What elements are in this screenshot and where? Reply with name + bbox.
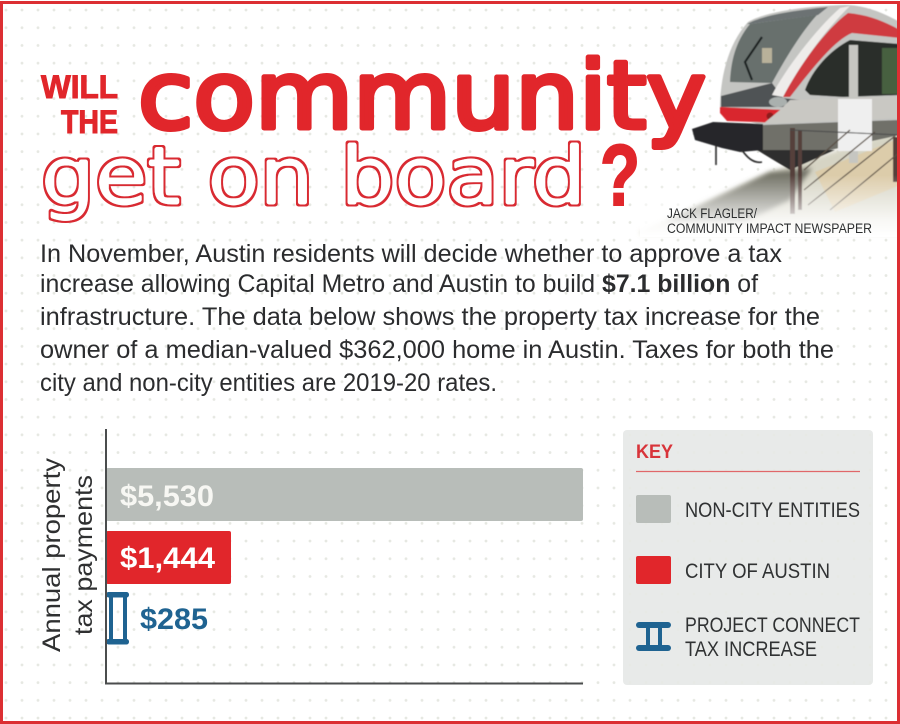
key: project connect: PROJECT CONNECT xyxy=(685,614,860,637)
title: will the xyxy=(41,69,118,140)
bar: Project Connect tax increase xyxy=(106,592,208,644)
title: get on board: get on board xyxy=(41,130,586,223)
bar: non-city entities xyxy=(106,468,583,521)
bar: city of Austin xyxy=(106,531,231,584)
title: will the: THE xyxy=(61,104,118,140)
title: question mark: ? xyxy=(600,128,640,224)
y-axis title: tax payments xyxy=(70,475,98,635)
bar: non-city entities: $5,530 xyxy=(120,480,214,513)
photo credit: JACK FLAGLER/ xyxy=(667,206,757,221)
title: community: community xyxy=(138,42,706,151)
key: city of Austin xyxy=(636,556,830,584)
title: will the: WILL xyxy=(41,69,118,105)
y-axis title xyxy=(38,457,98,652)
bar chart xyxy=(38,429,583,684)
key: non-city entities xyxy=(636,495,860,523)
key heading: KEY xyxy=(636,442,673,463)
bar: Project Connect tax increase: $285 xyxy=(140,603,208,636)
intro text: In November, Austin residents will decide whether to approve a tax xyxy=(40,240,782,268)
title xyxy=(41,42,706,224)
key: non-city entities: NON-CITY ENTITIES xyxy=(685,499,860,522)
bar: city of Austin: $1,444 xyxy=(120,542,215,575)
intro text: city and non-city entities are 2019-20 rates. xyxy=(40,369,497,397)
photo credit xyxy=(667,206,872,236)
panel: key xyxy=(623,430,873,685)
intro text xyxy=(40,240,834,397)
intro text: increase allowing Capital Metro and Austin to build $7.1 billion of xyxy=(40,270,758,298)
key: city of Austin: CITY OF AUSTIN xyxy=(685,560,830,583)
photo: Capital Metro train xyxy=(640,5,900,237)
intro text: owner of a median-valued $362,000 home in Austin. Taxes for both the xyxy=(40,336,834,364)
axes xyxy=(106,429,583,684)
intro text: infrastructure. The data below shows the property tax increase for the xyxy=(40,303,820,331)
photo credit: COMMUNITY IMPACT NEWSPAPER xyxy=(667,221,872,236)
key: project connect: TAX INCREASE xyxy=(685,638,817,661)
key: project connect xyxy=(636,614,860,661)
y-axis title: Annual property xyxy=(38,457,66,652)
